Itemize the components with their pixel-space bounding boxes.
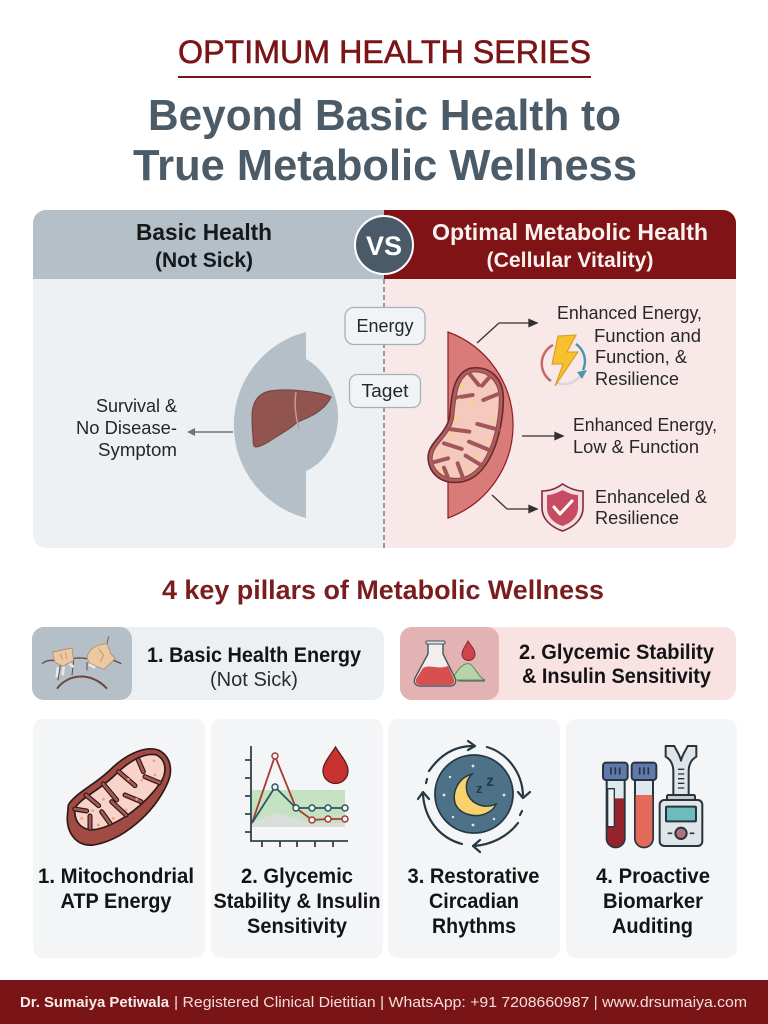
card 4 label: Auditing: [612, 915, 693, 938]
label: enhanced energy middle: Enhanced Energy,: [573, 415, 717, 435]
red semicircle: [448, 332, 513, 518]
section heading: 4 key pillars of Metabolic Wellness: [162, 575, 604, 605]
label: survival: Survival &: [96, 396, 177, 416]
card 3 label: [408, 865, 540, 938]
card 2 label: Sensitivity: [247, 915, 347, 938]
label: survival: [76, 396, 177, 460]
arrow: liver to survival: [187, 428, 233, 436]
icon: mitochondrion: [428, 368, 503, 482]
icon: liver: [252, 390, 331, 447]
VS badge: VS: [366, 231, 402, 261]
main heading: [133, 91, 637, 190]
icon: moon in cycle: z: [476, 781, 483, 796]
icon: damaged cell: [42, 636, 121, 689]
icon: flask and drop: [414, 641, 485, 686]
card 4 label: Biomarker: [603, 890, 703, 913]
card 2 label: [214, 865, 380, 938]
arrow: to energy: [477, 320, 537, 343]
right column header: Optimal Metabolic Health: [432, 219, 708, 245]
label: enhanced energy top: Function, &: [595, 347, 687, 367]
label: enhanced energy middle: Low & Function: [573, 437, 699, 457]
grey semicircle with liver: [234, 332, 338, 518]
label: enhanced energy top: Function and: [594, 326, 701, 346]
left column header: Basic Health: [136, 219, 272, 245]
footer: | Registered Clinical Dietitian | WhatsApp: +91 7208660987 | www.drsumaiya.com: [174, 994, 747, 1011]
card 3 label: Rhythms: [432, 915, 516, 938]
card 3 label: 3. Restorative: [408, 865, 540, 888]
icon: moon in cycle: z: [486, 773, 494, 790]
arrow: to function: [522, 432, 563, 440]
arrow: to resilience: [492, 495, 537, 512]
label: enhanceled: Enhanceled &: [595, 487, 707, 507]
card 1 label: [38, 865, 194, 913]
footer: Dr. Sumaiya Petiwala: [20, 994, 170, 1011]
left column header: [136, 219, 272, 272]
series title: OPTIMUM HEALTH SERIES: [178, 34, 591, 70]
icon: glucose chart: [245, 746, 348, 847]
label: enhanced energy top: Enhanced Energy,: [557, 303, 702, 323]
pillar 2 text: [519, 641, 714, 688]
comparison panel: [33, 210, 736, 548]
card 3 label: Circadian: [429, 890, 519, 913]
card 1 label: 1. Mitochondrial: [38, 865, 194, 888]
pillar 1 text: [147, 644, 361, 691]
icon: shield: [542, 484, 583, 531]
icon: blood tubes and analyzer: [603, 746, 702, 847]
icon: lightning with cycle: [542, 335, 587, 386]
right column header: (Cellular Vitality): [486, 249, 654, 272]
pillar 2 text: 2. Glycemic Stability: [519, 641, 714, 664]
card 2: glycemic: [211, 719, 383, 958]
card 1: mitochondrial: [33, 719, 205, 958]
card 4 label: [596, 865, 710, 938]
icon: mitochondrion: [67, 749, 170, 845]
target pill: Taget: [362, 381, 408, 401]
target pill: [350, 374, 420, 408]
pillar 1 text: 1. Basic Health Energy: [147, 644, 361, 667]
right column header: [432, 219, 708, 272]
label: enhanced energy top: Resilience: [595, 369, 679, 389]
energy pill: [345, 308, 425, 344]
card 4 label: 4. Proactive: [596, 865, 710, 888]
label: enhanceled: [595, 487, 707, 528]
card 2 label: Stability & Insulin: [214, 890, 380, 913]
label: survival: Symptom: [98, 440, 177, 460]
left column header: (Not Sick): [155, 249, 253, 272]
VS badge: [355, 216, 413, 274]
icon: moon in cycle: [418, 741, 530, 852]
card 3: circadian: [388, 719, 560, 958]
footer: [0, 980, 768, 1024]
card 2 label: 2. Glycemic: [241, 865, 353, 888]
label: enhanceled: Resilience: [595, 508, 679, 528]
card 1 label: ATP Energy: [60, 890, 172, 913]
icon: blood drop: [323, 747, 348, 784]
main heading: True Metabolic Wellness: [133, 141, 637, 190]
main heading: Beyond Basic Health to: [148, 91, 621, 140]
card 4: biomarker: [566, 719, 737, 958]
label: survival: No Disease-: [76, 418, 177, 438]
pillar bar 2: [400, 627, 736, 700]
label: enhanced energy middle: [573, 415, 717, 457]
pillar 2 text: & Insulin Sensitivity: [522, 665, 711, 688]
pillar 1 text: (Not Sick): [210, 669, 298, 691]
energy pill: Energy: [356, 316, 414, 336]
label: enhanced energy top: [557, 303, 702, 389]
pillar bar 1: [32, 627, 384, 700]
